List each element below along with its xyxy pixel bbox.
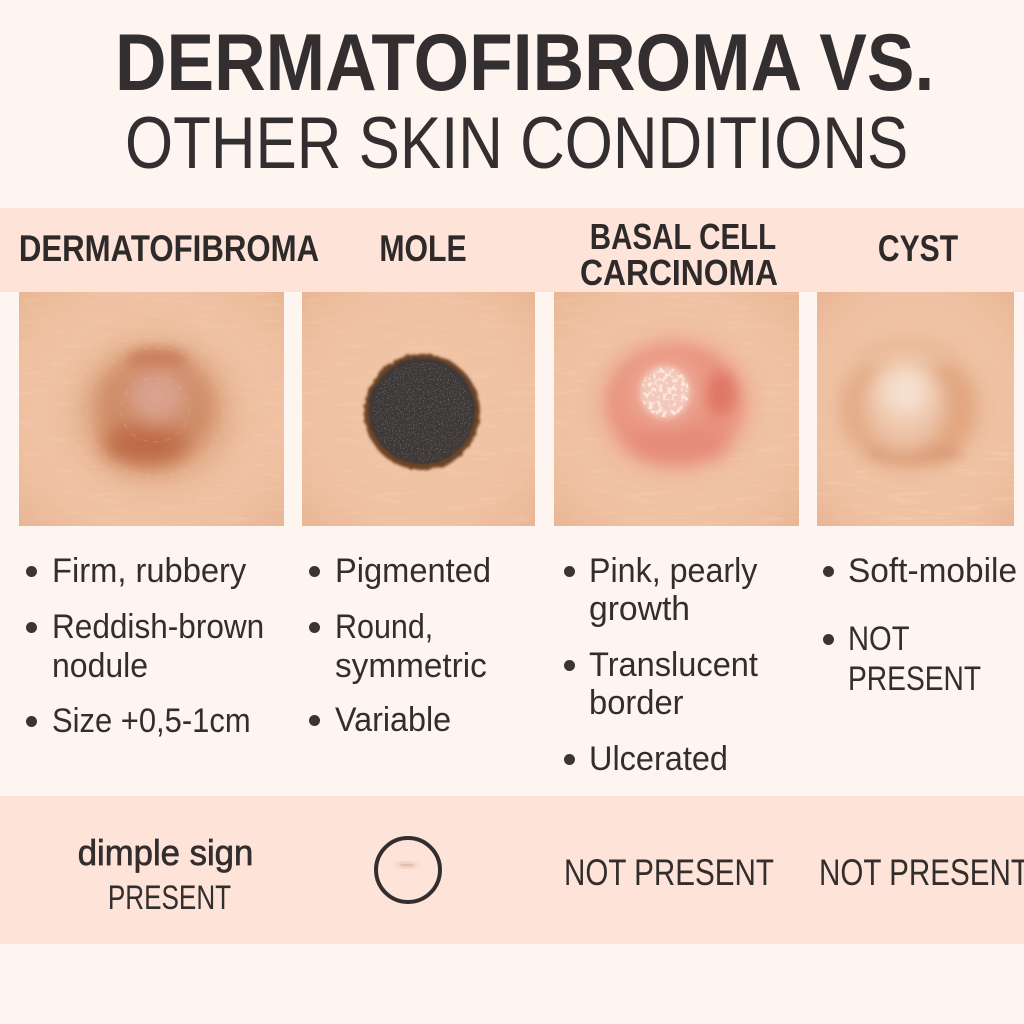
list: mole features: symmetric	[335, 647, 487, 685]
list: mole features: Round,	[335, 608, 433, 646]
photo: basal cell carcinoma	[554, 292, 799, 526]
list: cyst features: NOT	[848, 620, 910, 658]
column heading: mole: MOLE	[379, 228, 467, 269]
list: mole features: Pigmented	[335, 552, 491, 590]
list: mole features: Variable	[335, 701, 451, 739]
photo: mole	[302, 292, 535, 526]
column heading: basal cell carcinoma: BASAL CELL	[590, 216, 776, 257]
list: dermatofibroma features: Size +0,5-1cm	[52, 702, 251, 740]
list: cyst features	[823, 552, 1017, 698]
list: basal cell carcinoma features: Translucent	[589, 646, 758, 684]
header band	[0, 208, 1024, 292]
list: basal cell carcinoma features: Ulcerated	[589, 740, 728, 778]
column heading: cyst: CYST	[878, 228, 958, 269]
not present: cyst: NOT PRESENT	[819, 852, 1024, 893]
title	[115, 18, 934, 184]
dimple sign label: dimple sign	[78, 832, 253, 873]
not present: basal cell carcinoma: NOT PRESENT	[564, 852, 774, 893]
photo: cyst	[817, 292, 1014, 526]
icon: dimple circle	[374, 836, 442, 904]
list: basal cell carcinoma features: Pink, pearly	[589, 552, 757, 590]
column heading: basal cell carcinoma	[580, 216, 778, 292]
title: OTHER SKIN CONDITIONS	[125, 103, 908, 184]
photo: dermatofibroma	[19, 292, 284, 526]
list: dermatofibroma features: Reddish-brown	[52, 608, 264, 646]
list: basal cell carcinoma features: growth	[589, 590, 690, 628]
list: mole features	[309, 552, 491, 739]
list: dermatofibroma features: nodule	[52, 647, 148, 685]
column heading: basal cell carcinoma: CARCINOMA	[580, 252, 778, 292]
list: dermatofibroma features: Firm, rubbery	[52, 552, 246, 590]
dimple sign band	[0, 796, 1024, 944]
title: DERMATOFIBROMA VS.	[115, 18, 934, 108]
list: basal cell carcinoma features: border	[589, 684, 684, 722]
column heading: dermatofibroma: DERMATOFIBROMA	[19, 228, 319, 269]
dimple sign label	[78, 832, 253, 917]
list: cyst features: PRESENT	[848, 660, 981, 698]
dimple sign label: PRESENT	[108, 879, 231, 917]
list: basal cell carcinoma features	[564, 552, 758, 778]
list: dermatofibroma features	[26, 552, 264, 740]
list: cyst features: Soft-mobile	[848, 552, 1017, 590]
